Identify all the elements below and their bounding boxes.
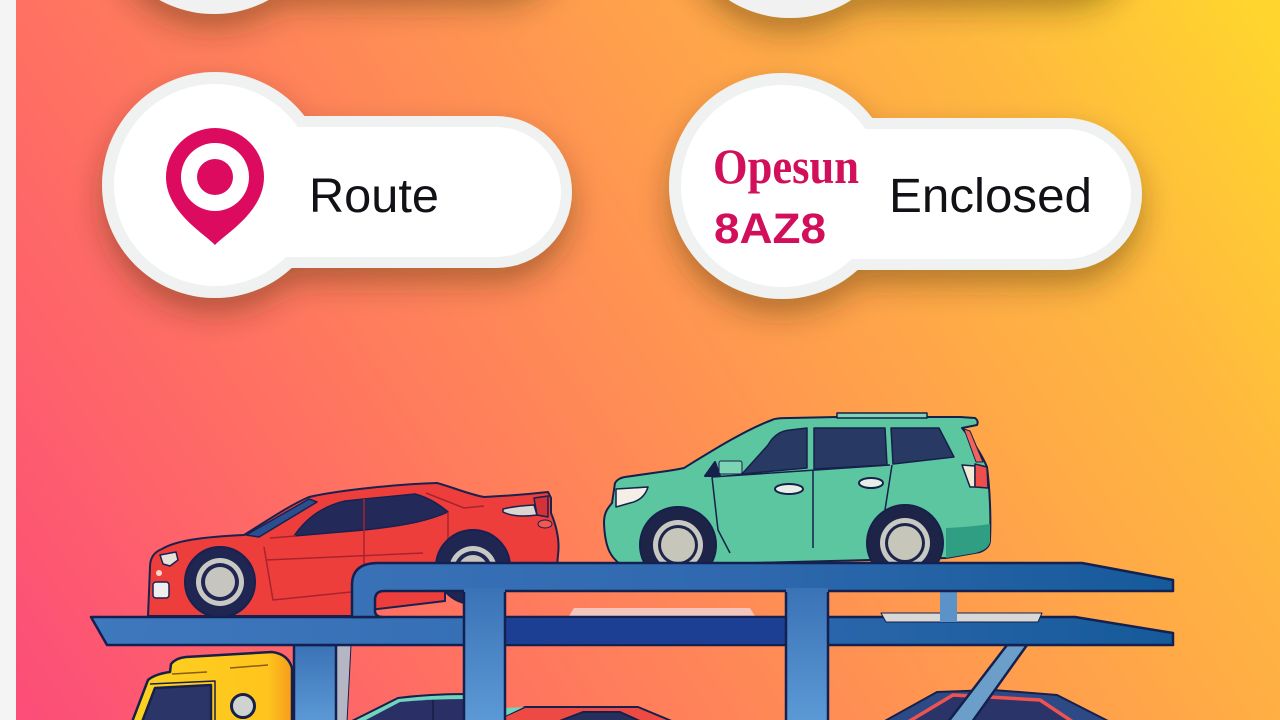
suv front window <box>742 428 807 474</box>
truck: yellow cab <box>132 652 292 720</box>
suv middle window <box>814 428 887 469</box>
icon: location pin <box>166 128 264 245</box>
red car side marker <box>156 570 162 576</box>
icon text: rate: 8AZ8 <box>714 205 826 253</box>
car: green suv on upper right deck <box>604 413 990 583</box>
suv door handle front <box>775 484 803 494</box>
red car rear lamp <box>538 520 552 528</box>
car: teal car on lower left deck <box>350 694 466 720</box>
suv rear window <box>891 428 954 464</box>
red car rear wheel <box>436 530 510 604</box>
suv mirror <box>719 461 742 474</box>
highlight strip left <box>569 608 755 616</box>
diagonal strut <box>948 645 1027 720</box>
teal car pillar <box>432 700 434 720</box>
suv mirror base <box>705 462 720 476</box>
red car spoiler block <box>534 496 548 517</box>
silver plates <box>881 613 1042 622</box>
red lower car window <box>557 712 642 720</box>
badge shape: enclosed <box>669 73 1142 299</box>
left post <box>294 645 336 720</box>
badge inner: enclosed <box>681 85 1131 287</box>
navy car inner body <box>908 695 1073 720</box>
left page margin <box>0 0 16 720</box>
teal car window <box>362 699 466 720</box>
truck roof lines <box>172 665 268 674</box>
cropped badge: top left <box>101 0 572 14</box>
red car door lines <box>264 493 484 600</box>
suv front wheel <box>640 507 716 583</box>
centre brace <box>940 592 957 622</box>
suv rear pillar light <box>964 429 983 462</box>
suv lower rear panel <box>946 524 990 558</box>
suv rear wheel <box>867 505 943 581</box>
upper deck with riser <box>352 563 1173 617</box>
badge: enclosed <box>669 73 1142 299</box>
car: red coupe on upper left deck <box>148 483 559 617</box>
truck round light <box>232 694 254 718</box>
truck window frame <box>150 681 215 720</box>
centre post left <box>464 588 505 720</box>
red car windshield <box>246 499 317 537</box>
car: red car on lower middle deck <box>505 707 674 720</box>
navy car red trim <box>908 695 1073 720</box>
truck window <box>142 685 211 720</box>
suv door handle rear <box>859 478 883 488</box>
grey rear support <box>336 645 351 720</box>
centre post right <box>786 588 828 720</box>
badge shape: route <box>102 72 572 298</box>
red car fog lamp <box>153 582 169 598</box>
suv roof rack <box>837 413 927 418</box>
red car front wheel <box>185 547 255 617</box>
cropped badge: top right <box>677 0 1142 18</box>
label: enclosed: Enclosed <box>889 170 1092 223</box>
red car headlight <box>160 552 178 566</box>
carrier rack: posts, decks and struts <box>91 563 1173 720</box>
teal fragment behind post <box>505 707 524 716</box>
suv tail light <box>962 464 988 488</box>
badge inner: route <box>114 84 561 286</box>
lower deck dark section <box>505 618 786 644</box>
red car windows <box>294 494 448 536</box>
suv headlight <box>616 487 648 507</box>
badge: route <box>102 72 572 298</box>
lower deck <box>91 617 1173 645</box>
label: route: Route <box>309 170 439 223</box>
suv door lines <box>712 465 892 553</box>
red car tail light <box>503 505 537 516</box>
icon text: open: Opesun <box>713 138 859 194</box>
car: navy car on lower right deck <box>883 690 1110 720</box>
